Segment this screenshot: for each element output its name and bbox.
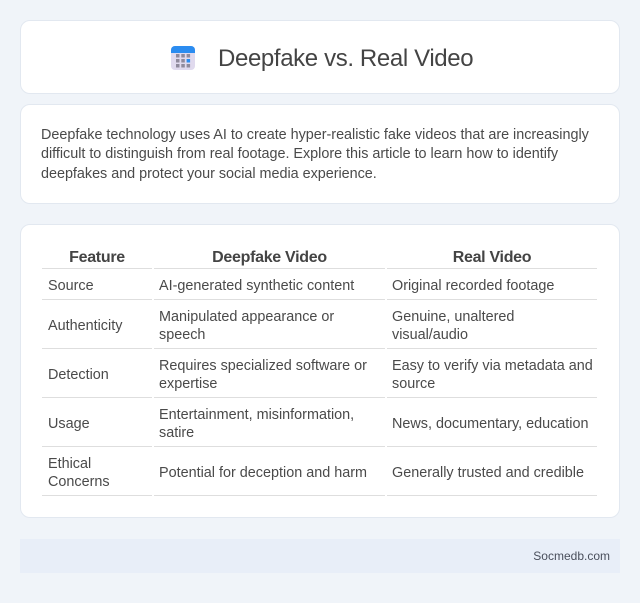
table: Generally trusted and credible (392, 465, 584, 481)
table: Original recorded footage (392, 278, 554, 294)
table: News, documentary, education (392, 416, 589, 432)
icon: calendar (171, 46, 195, 70)
header: Deepfake Video: Deepfake Video (212, 249, 327, 266)
table: speech (159, 327, 205, 343)
row: Ethical Concerns: Concerns (48, 474, 110, 490)
row: Ethical Concerns (48, 456, 110, 490)
table: satire (159, 425, 194, 441)
row: Usage: Usage (48, 416, 90, 432)
panel: comparison table (20, 224, 620, 518)
row: Ethical Concerns: Ethical (48, 456, 91, 472)
table: Easy to verify via metadata and (392, 358, 593, 374)
footer bar (20, 539, 620, 573)
footer credit: Socmedb.com (533, 549, 610, 563)
table: Potential for deception and harm (159, 465, 367, 481)
title: Deepfake vs. Real Video (218, 45, 473, 72)
table: AI-generated synthetic content (159, 278, 354, 294)
table: visual/audio (392, 327, 468, 343)
header: Real Video: Real Video (453, 249, 531, 266)
intro paragraph (41, 126, 589, 182)
table: Requires specialized software or (159, 358, 367, 374)
row: Authenticity: Authenticity (48, 318, 122, 334)
panel: intro text (20, 104, 620, 204)
panel: title card (20, 20, 620, 94)
intro paragraph: Deepfake technology uses AI to create hyper-realistic fake videos that are increasingly (41, 126, 589, 142)
table: Genuine, unaltered (392, 309, 514, 325)
intro paragraph: difficult to distinguish from real footage. Explore this article to learn how to identify (41, 146, 558, 162)
table: source (392, 376, 435, 392)
intro paragraph: deepfakes and protect your social media experience. (41, 166, 377, 182)
table: Manipulated appearance or (159, 309, 334, 325)
row: Detection: Detection (48, 367, 109, 383)
table: expertise (159, 376, 217, 392)
header: Feature: Feature (69, 249, 125, 266)
table: Entertainment, misinformation, (159, 407, 354, 423)
row: Source: Source (48, 278, 94, 294)
